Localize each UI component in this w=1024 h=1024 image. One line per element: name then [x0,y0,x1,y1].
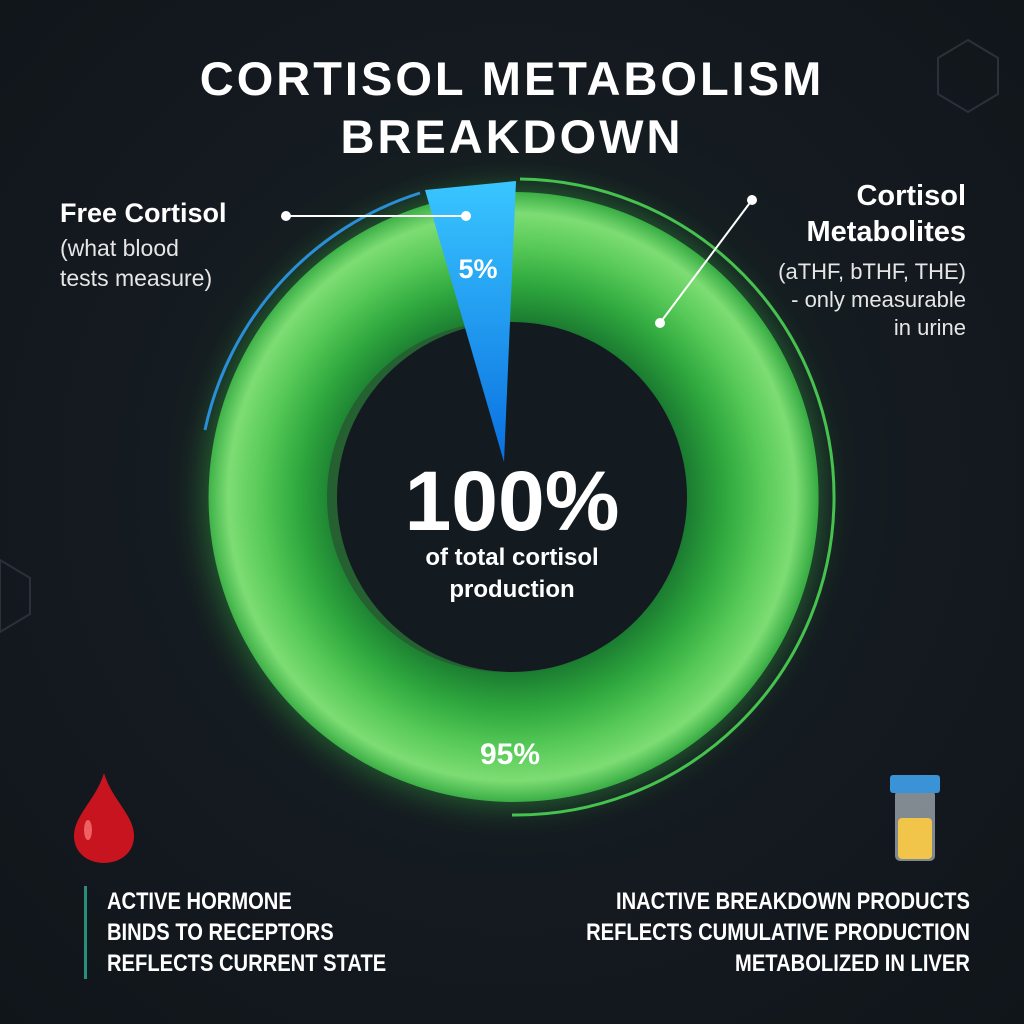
left bullet list: BINDS TO RECEPTORS [107,919,334,946]
icon: blood drop [74,773,134,863]
95% label: 95% [480,738,540,771]
blue wedge 5% [425,181,516,462]
label: free cortisol: (what blood [60,235,179,261]
label: cortisol metabolites [778,180,966,340]
left bullet list: REFLECTS CURRENT STATE [107,950,386,977]
label: cortisol metabolites: - only measurable [791,287,966,312]
right bullet list: METABOLIZED IN LIVER [735,950,970,977]
label: cortisol metabolites: Metabolites [806,216,966,248]
right bullet list: REFLECTS CUMULATIVE PRODUCTION [586,919,970,946]
hexagons [0,40,998,632]
blue wedge 5%: 5% [458,254,498,284]
left bullet list [84,886,439,979]
title [200,52,824,163]
right bullet list [586,888,970,977]
right bullet list: INACTIVE BREAKDOWN PRODUCTS [616,888,970,915]
outer thin arcs [205,193,420,430]
label: cortisol metabolites: Cortisol [856,180,966,212]
label: free cortisol: tests measure) [60,265,212,291]
center text: production [449,576,575,603]
left bullet list: ACTIVE HORMONE [107,888,292,915]
label: free cortisol [60,198,227,291]
title: CORTISOL METABOLISM [200,52,824,105]
label: cortisol metabolites: in urine [894,315,966,340]
center text [405,454,619,603]
green ring [209,192,819,802]
callout lines [286,215,466,217]
label: free cortisol: Free Cortisol [60,198,227,228]
center text: 100% [405,454,619,548]
title: BREAKDOWN [341,110,683,163]
center text: of total cortisol [425,544,599,571]
icon: urine cup [890,775,940,861]
label: cortisol metabolites: (aTHF, bTHF, THE) [778,259,966,284]
